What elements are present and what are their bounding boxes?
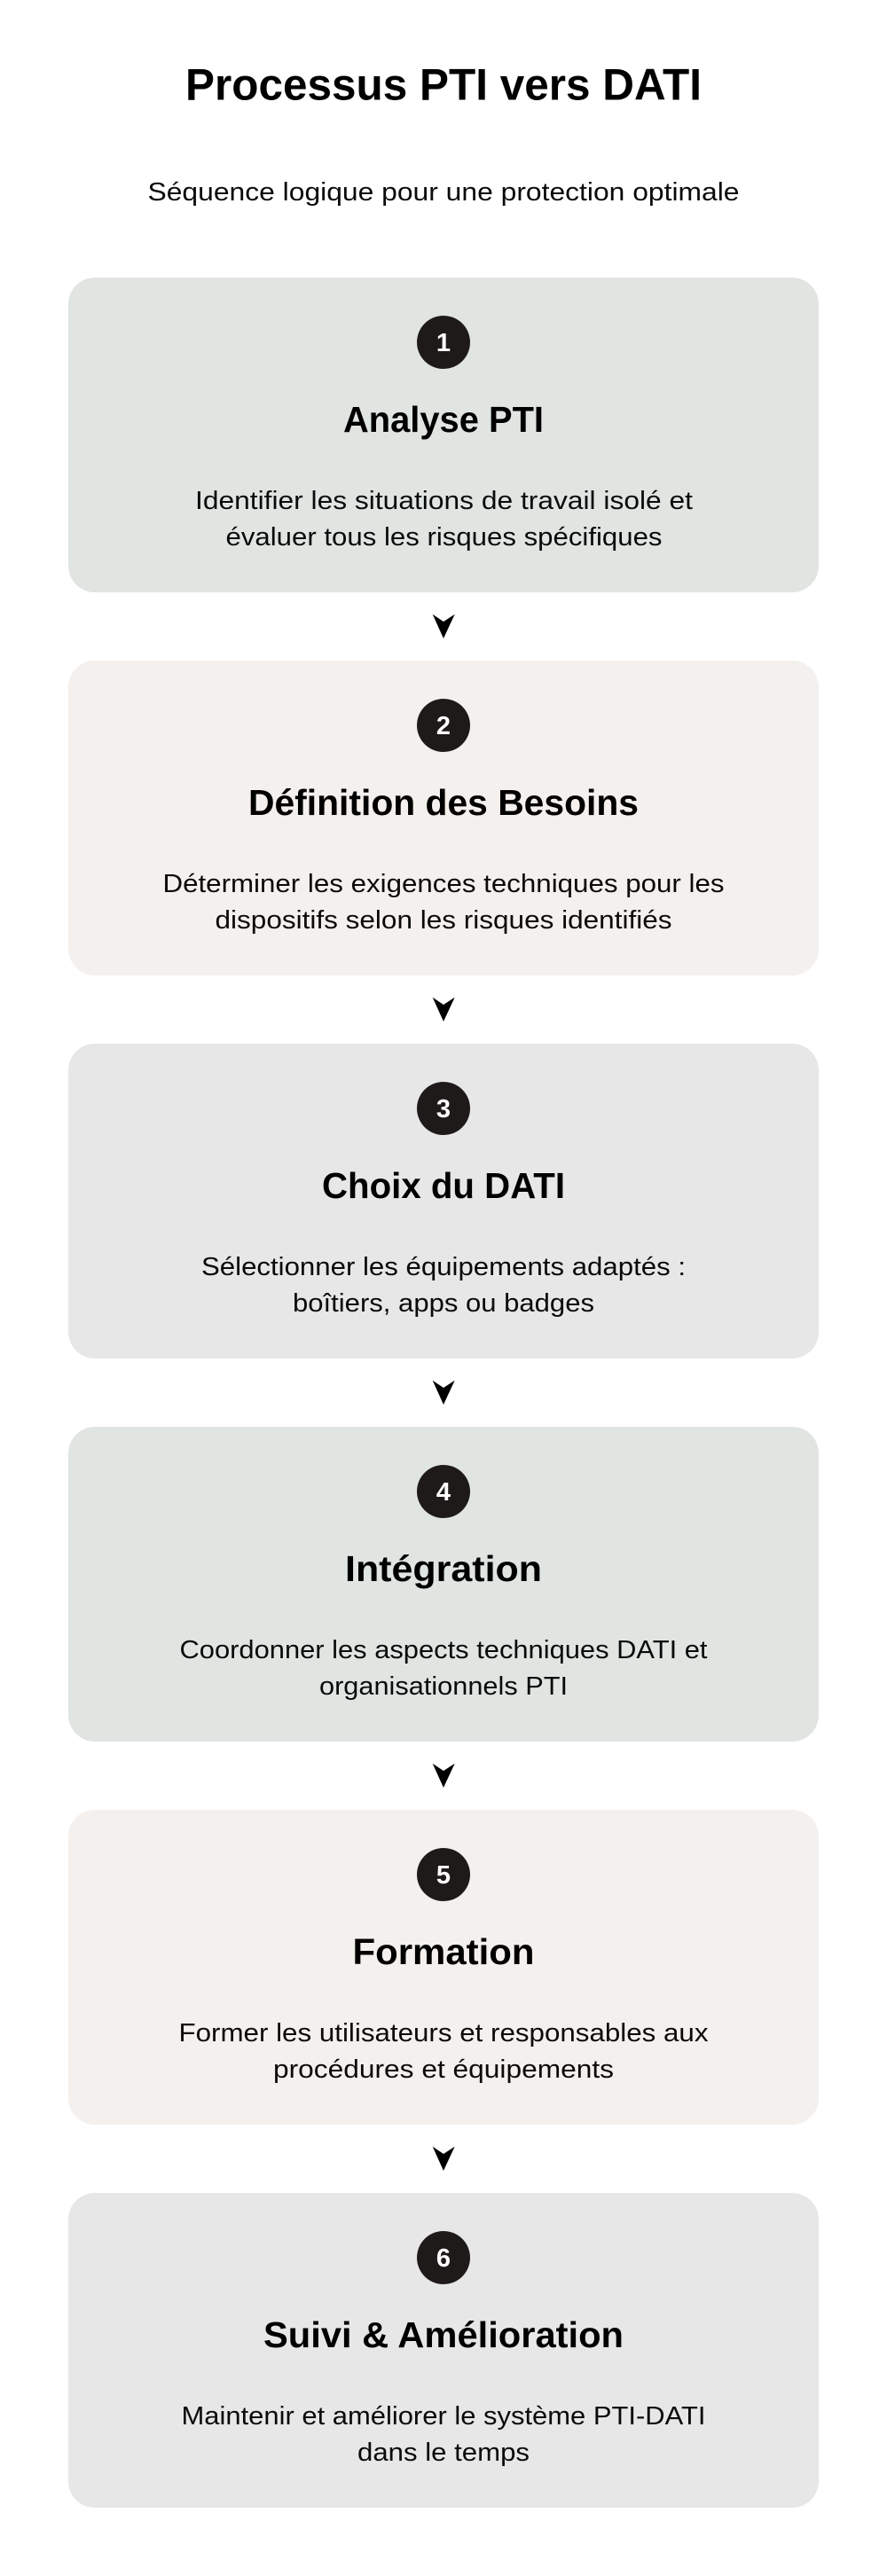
description 2: dispositifs selon les risques identifiés	[215, 906, 672, 935]
number badge 3	[417, 1082, 470, 1135]
arrow 3 to 4	[433, 1381, 455, 1405]
arrow 4 to 5	[433, 1764, 455, 1788]
description 5: Former les utilisateurs et responsables aux	[179, 2019, 709, 2047]
description 6: Maintenir et améliorer le système PTI-DATI	[181, 2402, 706, 2431]
panel background 5	[68, 1810, 819, 2125]
description 6	[181, 2402, 706, 2467]
description 1	[195, 487, 693, 552]
description 3	[201, 1253, 686, 1318]
arrow 2 to 3	[433, 998, 455, 1022]
panel: step 4	[68, 1427, 819, 1742]
panel: step 3	[68, 1044, 819, 1358]
number badge 3: 3	[436, 1095, 451, 1124]
description 1: Identifier les situations de travail isolé et	[195, 487, 693, 515]
heading 3: Choix du DATI	[322, 1165, 565, 1206]
number badge 1	[417, 316, 470, 369]
panel: step 2	[68, 661, 819, 975]
number badge 5	[417, 1848, 470, 1901]
number badge 4	[417, 1465, 470, 1518]
panel background 2	[68, 661, 819, 975]
panel: step 6	[68, 2193, 819, 2508]
panel background 1	[68, 278, 819, 592]
description 3: boîtiers, apps ou badges	[293, 1289, 594, 1318]
number badge 5: 5	[436, 1861, 451, 1890]
number badge 1: 1	[436, 329, 451, 357]
description 4: organisationnels PTI	[319, 1672, 568, 1701]
description 4: Coordonner les aspects techniques DATI et	[179, 1636, 708, 1664]
description 6: dans le temps	[357, 2439, 530, 2467]
number badge 6: 6	[436, 2244, 451, 2273]
description 3: Sélectionner les équipements adaptés :	[201, 1253, 686, 1281]
number badge 4: 4	[436, 1478, 451, 1507]
arrow 1 to 2	[433, 615, 455, 638]
panel background 3	[68, 1044, 819, 1358]
title: Processus PTI vers DATI	[185, 60, 702, 110]
arrow 5 to 6	[433, 2147, 455, 2171]
heading 4: Intégration	[345, 1548, 542, 1589]
description 5	[179, 2019, 709, 2084]
number badge 2: 2	[436, 712, 451, 740]
heading 6: Suivi & Amélioration	[263, 2314, 624, 2355]
description 5: procédures et équipements	[273, 2055, 614, 2084]
description 2: Déterminer les exigences techniques pour les	[163, 870, 724, 898]
heading 1: Analyse PTI	[343, 399, 544, 440]
panel: step 5	[68, 1810, 819, 2125]
subtitle: Séquence logique pour une protection optimale	[147, 178, 740, 207]
heading 5: Formation	[353, 1931, 534, 1972]
description 2	[163, 870, 724, 935]
panel: step 1	[68, 278, 819, 592]
panel background 4	[68, 1427, 819, 1742]
description 4	[179, 1636, 708, 1701]
number badge 6	[417, 2231, 470, 2284]
description 1: évaluer tous les risques spécifiques	[225, 523, 662, 552]
heading 2: Définition des Besoins	[248, 782, 639, 823]
panel background 6	[68, 2193, 819, 2508]
number badge 2	[417, 699, 470, 752]
